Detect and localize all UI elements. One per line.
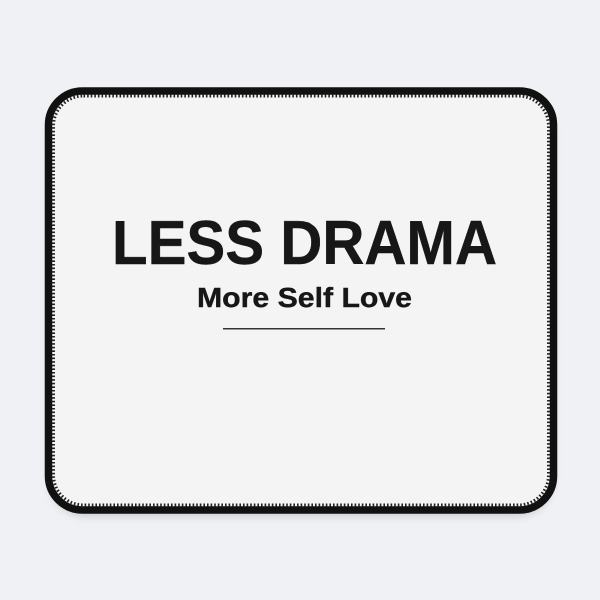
stitched black border: [48, 91, 554, 510]
heading: LESS DRAMA: [112, 209, 497, 278]
mat shadow: [48, 96, 554, 517]
stitch detail: [54, 96, 548, 505]
underline: [223, 328, 385, 330]
mouse mat: [48, 91, 554, 510]
subheading: More Self Love: [197, 282, 412, 313]
